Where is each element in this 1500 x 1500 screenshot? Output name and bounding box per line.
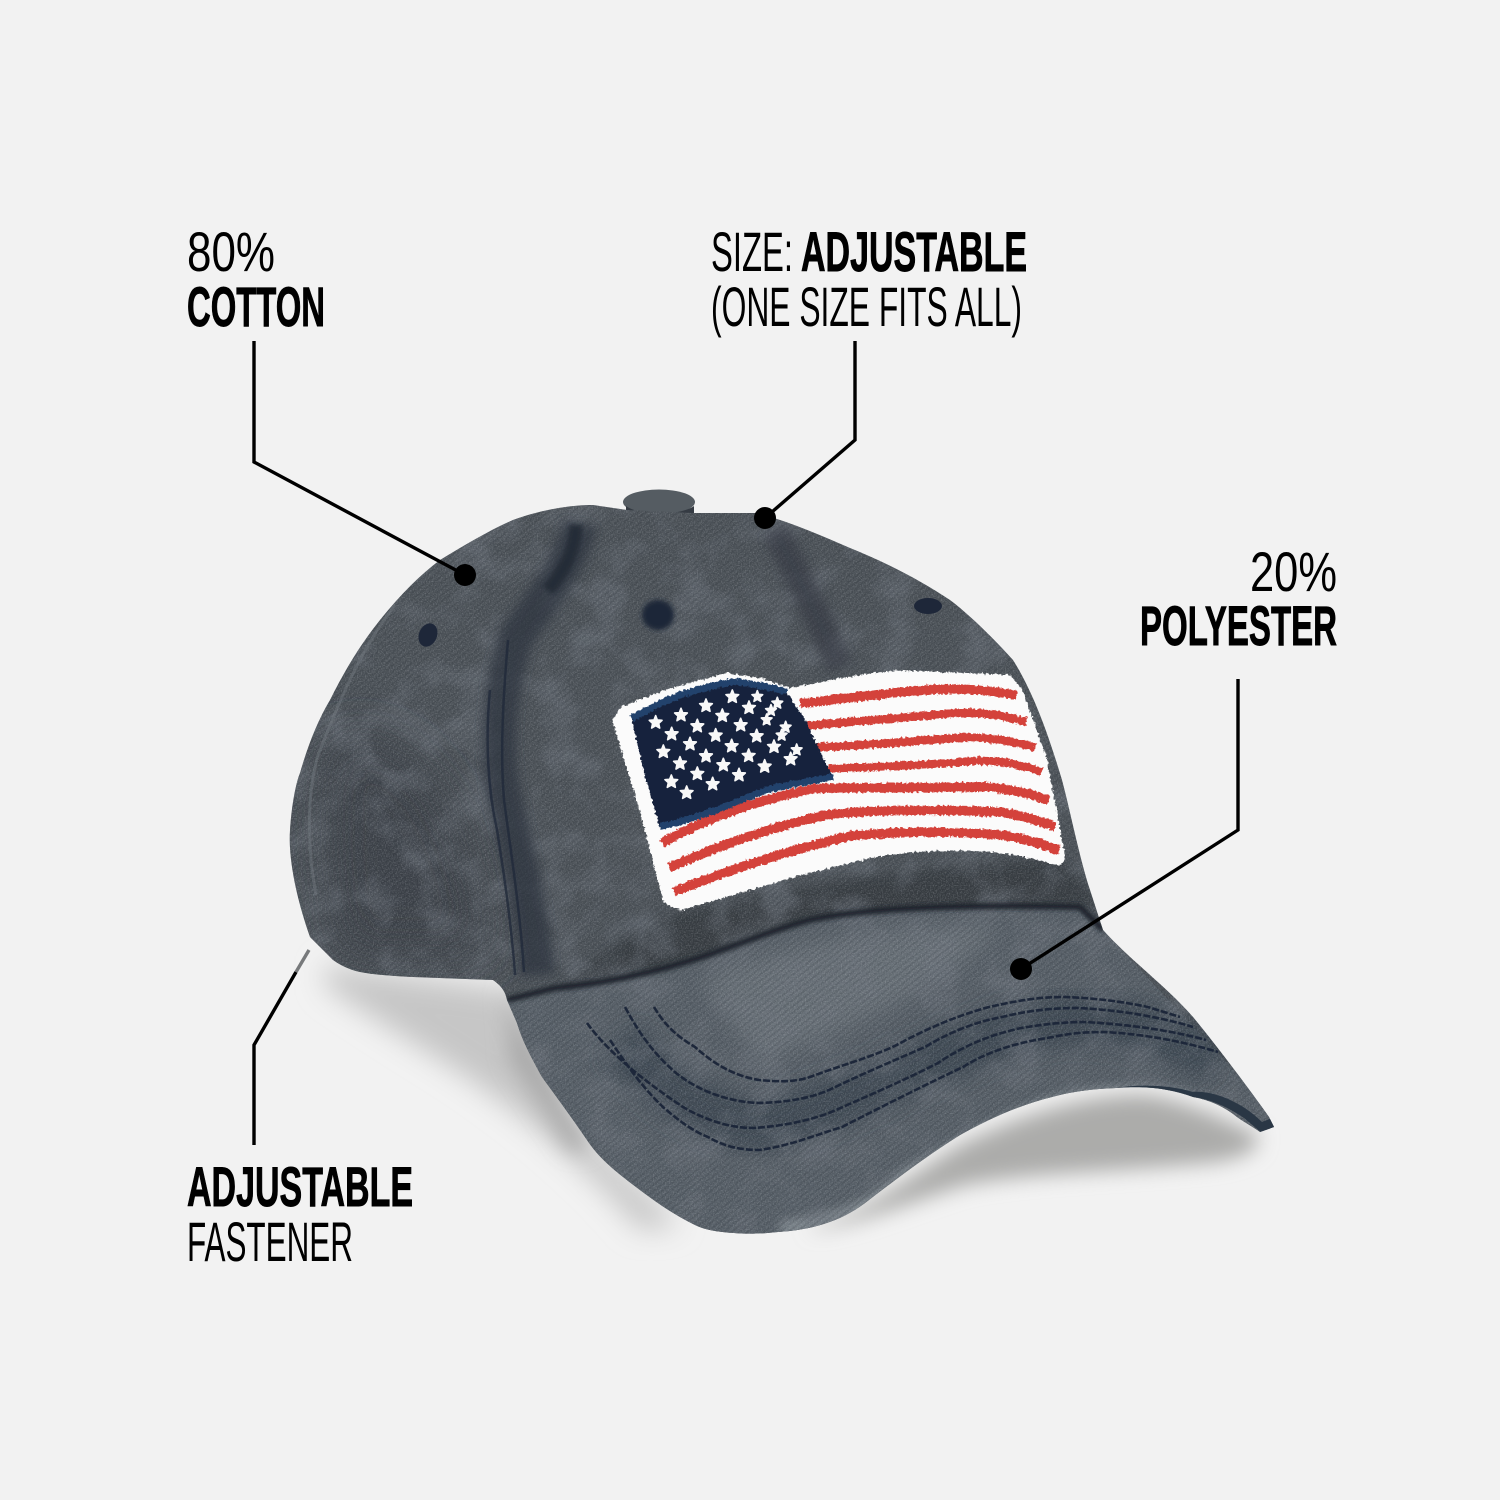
label: polyester: POLYESTER — [1140, 594, 1337, 657]
grain — [280, 490, 1290, 1250]
leader dot: cotton — [454, 564, 476, 586]
white patch — [616, 674, 1062, 907]
highlight along visor edge — [780, 1093, 1190, 1228]
leader line: polyester — [1021, 679, 1238, 969]
visor — [500, 906, 1290, 1240]
dark fold near top of seam — [548, 525, 576, 590]
light area top of visor — [710, 926, 985, 1050]
label: fastener: FASTENER — [187, 1210, 353, 1273]
crown and visor seam — [507, 906, 1103, 1000]
label: 80%: 80% — [187, 220, 275, 283]
leader line: size — [765, 341, 855, 518]
label: size adjustable: ADJUSTABLE — [801, 220, 1027, 283]
leader dot: polyester — [1010, 958, 1032, 980]
leader line: cotton — [254, 341, 465, 575]
back panel seam band — [499, 523, 580, 975]
label: adjustable: ADJUSTABLE — [187, 1155, 413, 1218]
twill weave — [280, 490, 1290, 1250]
blue canton — [632, 682, 833, 828]
visor stitching — [587, 997, 1218, 1150]
pale left ribs — [309, 605, 395, 895]
label: cotton: COTTON — [187, 275, 325, 338]
eyelets — [415, 598, 942, 649]
button on top of crown — [623, 490, 695, 516]
visor underside tip — [1116, 1086, 1274, 1133]
label: size adjustable: SIZE: — [711, 220, 793, 283]
flag patch — [616, 674, 1062, 907]
callout: size adjustable — [711, 220, 1027, 529]
dark area under patch — [560, 860, 1100, 990]
top right seam band — [775, 530, 840, 668]
callout: adjustable fastener — [187, 950, 413, 1273]
dark lower left panel — [323, 736, 490, 960]
label: 20%: 20% — [1250, 540, 1337, 603]
hat photo illustration — [280, 490, 1290, 1250]
leader dot: size — [754, 507, 776, 529]
leader line: fastener — [254, 950, 309, 1145]
dark band around visor stitching — [620, 1020, 1220, 1125]
cap body — [280, 490, 1290, 1250]
label: one size fits all: (ONE SIZE FITS ALL) — [711, 275, 1022, 338]
callout: 20% polyester — [1010, 540, 1337, 980]
red stripes — [662, 689, 1059, 892]
thin seam stitches — [488, 640, 524, 975]
cast shadow — [325, 965, 1258, 1230]
stars — [649, 690, 802, 798]
washed texture — [290, 505, 1214, 1222]
callout: 80% cotton — [187, 220, 476, 586]
